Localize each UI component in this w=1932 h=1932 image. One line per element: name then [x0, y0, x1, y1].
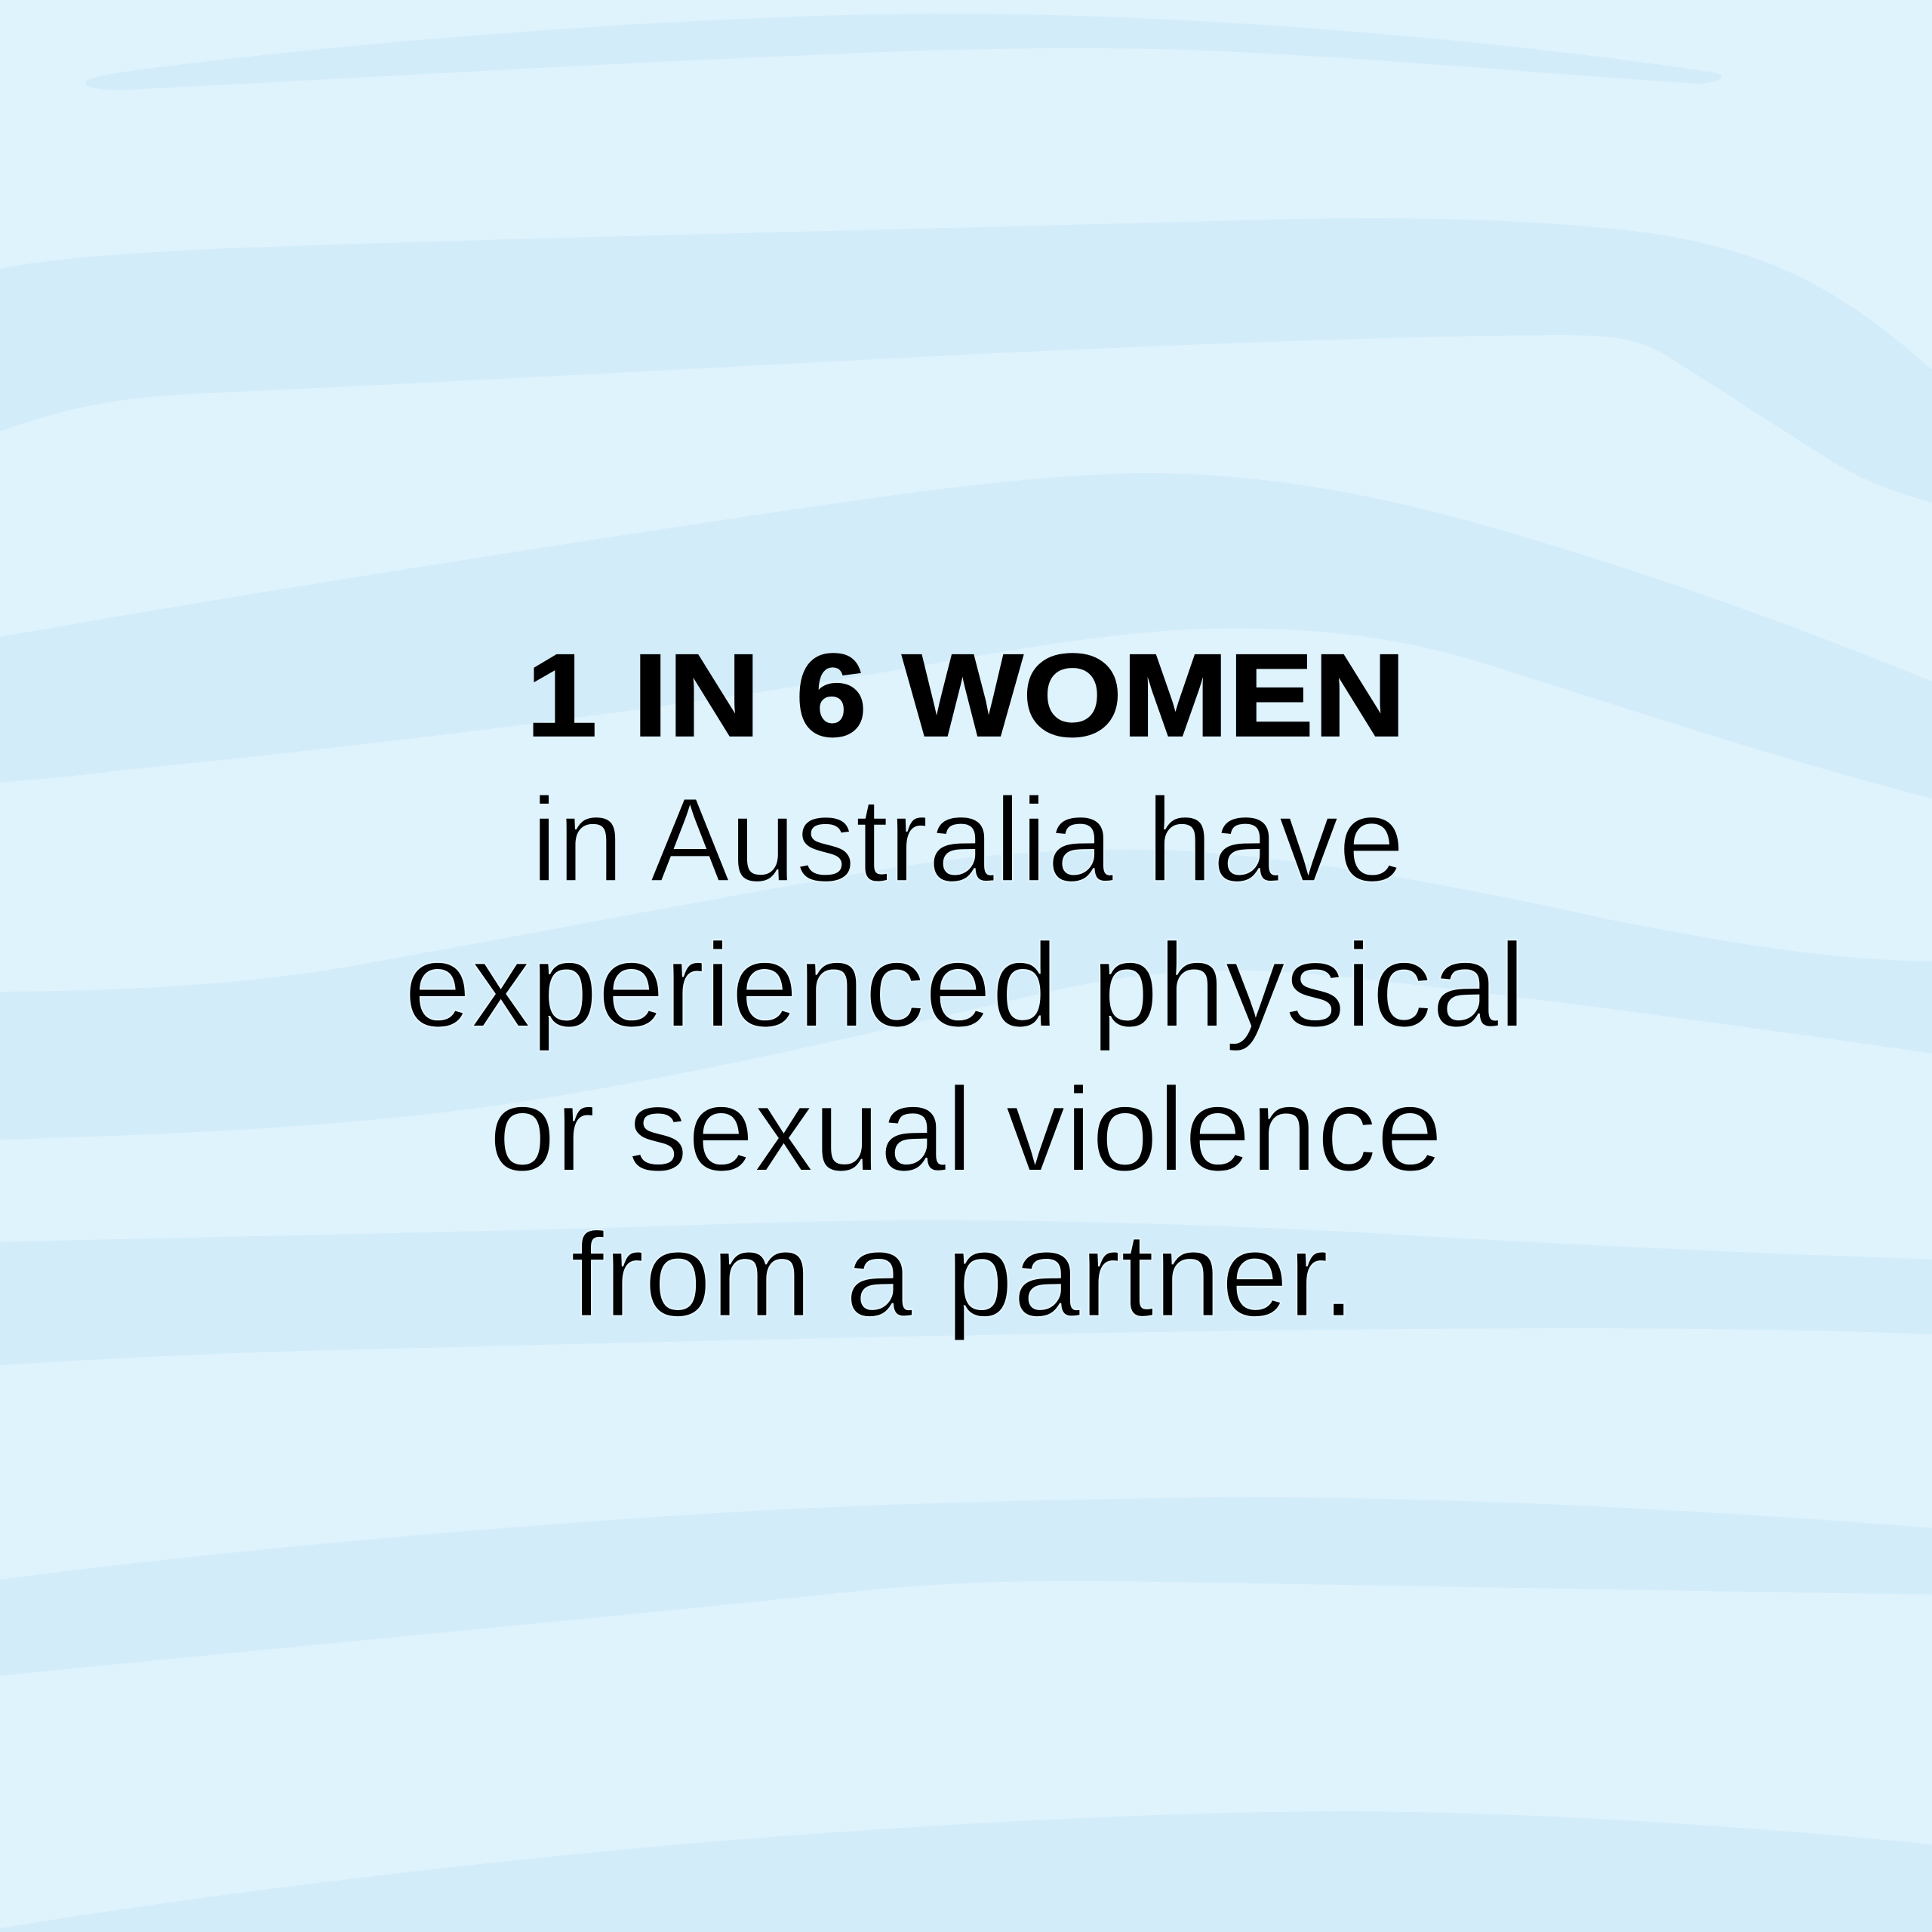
body text line 1: in Australia have [531, 773, 1404, 906]
body text line 4: from a partner. [571, 1208, 1355, 1342]
heading: 1 in 6 women: 1 IN 6 WOMEN [526, 630, 1406, 761]
body text line 3: or sexual violence [489, 1063, 1443, 1196]
body text line 2: experienced physical [405, 918, 1525, 1052]
main text block [405, 630, 1525, 1342]
